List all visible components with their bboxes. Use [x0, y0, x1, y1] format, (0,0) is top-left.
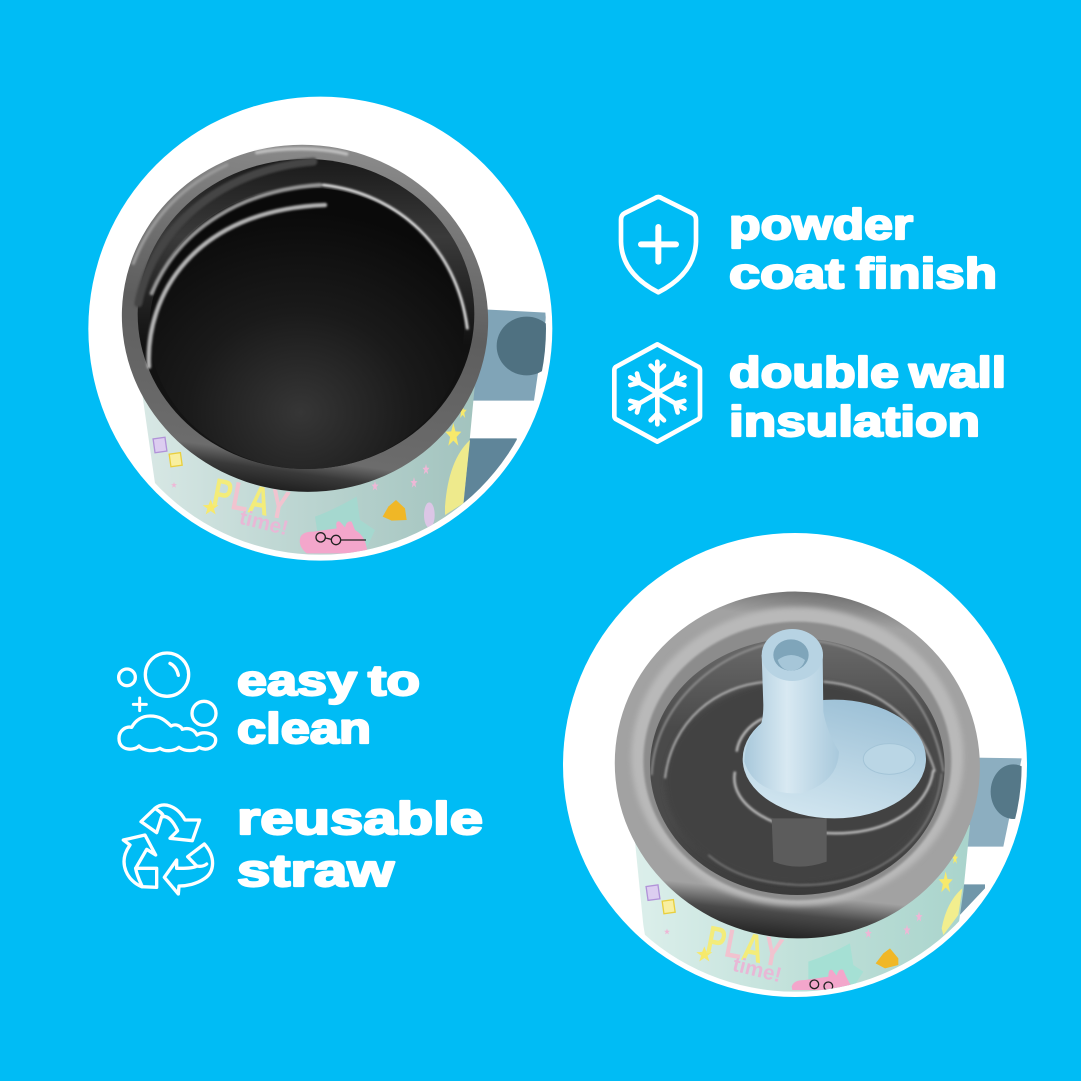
Peppa pig character [792, 969, 853, 991]
label: easy [237, 657, 357, 705]
icon: snowflake hexagon [614, 344, 700, 442]
icon: soap bubbles [119, 653, 216, 751]
toy blocks [646, 885, 675, 914]
label: coat [729, 250, 844, 298]
photo panel: open mug interior [88, 97, 557, 563]
printed mug body [142, 383, 475, 563]
lid outer ring [614, 592, 980, 938]
straw hole [773, 639, 809, 671]
yellow dinosaur toy [876, 948, 898, 968]
mug photo with lid [614, 592, 1022, 992]
label: insulation [729, 398, 980, 446]
interior well [149, 188, 464, 469]
label: double [729, 349, 899, 397]
toy blocks [153, 437, 182, 467]
label [237, 793, 483, 896]
interior highlights [133, 149, 467, 367]
lid opening [650, 638, 945, 895]
icon: recycling arrows [123, 805, 213, 894]
lid ridges [652, 640, 943, 885]
lid rim light band [631, 607, 963, 906]
PLAY time lettering: PLAY [703, 918, 786, 976]
yellow dinosaur toy [383, 500, 407, 521]
label: finish [856, 250, 997, 298]
label [237, 657, 420, 753]
feature: double wall insulation [614, 344, 1006, 446]
straw below lid [772, 818, 827, 867]
straw tube [744, 655, 839, 793]
white circle [88, 97, 552, 561]
Peppa print pattern [646, 852, 962, 991]
label: clean [237, 705, 371, 753]
label [729, 349, 1006, 446]
disc button [863, 744, 915, 774]
white circle [563, 533, 1027, 997]
photo panel: lid and straw [563, 533, 1036, 998]
PLAY time lettering: PLAY [209, 471, 293, 529]
label: to [368, 657, 420, 705]
printed mug body [635, 825, 970, 998]
PLAY time lettering: time! [730, 953, 784, 987]
feature: reusable straw [123, 793, 483, 896]
label: wall [908, 349, 1006, 397]
mug photo [122, 144, 546, 555]
handle [464, 310, 546, 503]
label: reusable [237, 793, 483, 844]
handle [960, 758, 1022, 915]
feature: powder coat finish [621, 197, 997, 298]
PLAY time lettering: time! [237, 506, 291, 540]
label: powder [729, 201, 913, 249]
icon: shield with plus [621, 197, 696, 292]
rim inner wall [138, 159, 474, 469]
Peppa pig character [300, 521, 367, 553]
metal rim [122, 144, 488, 492]
straw top [762, 629, 823, 681]
Peppa print pattern [153, 405, 470, 553]
feature: easy to clean [119, 653, 420, 753]
PLAY time lettering [706, 926, 784, 982]
silicone disc [743, 700, 926, 818]
label [729, 201, 997, 298]
label: straw [237, 845, 395, 896]
